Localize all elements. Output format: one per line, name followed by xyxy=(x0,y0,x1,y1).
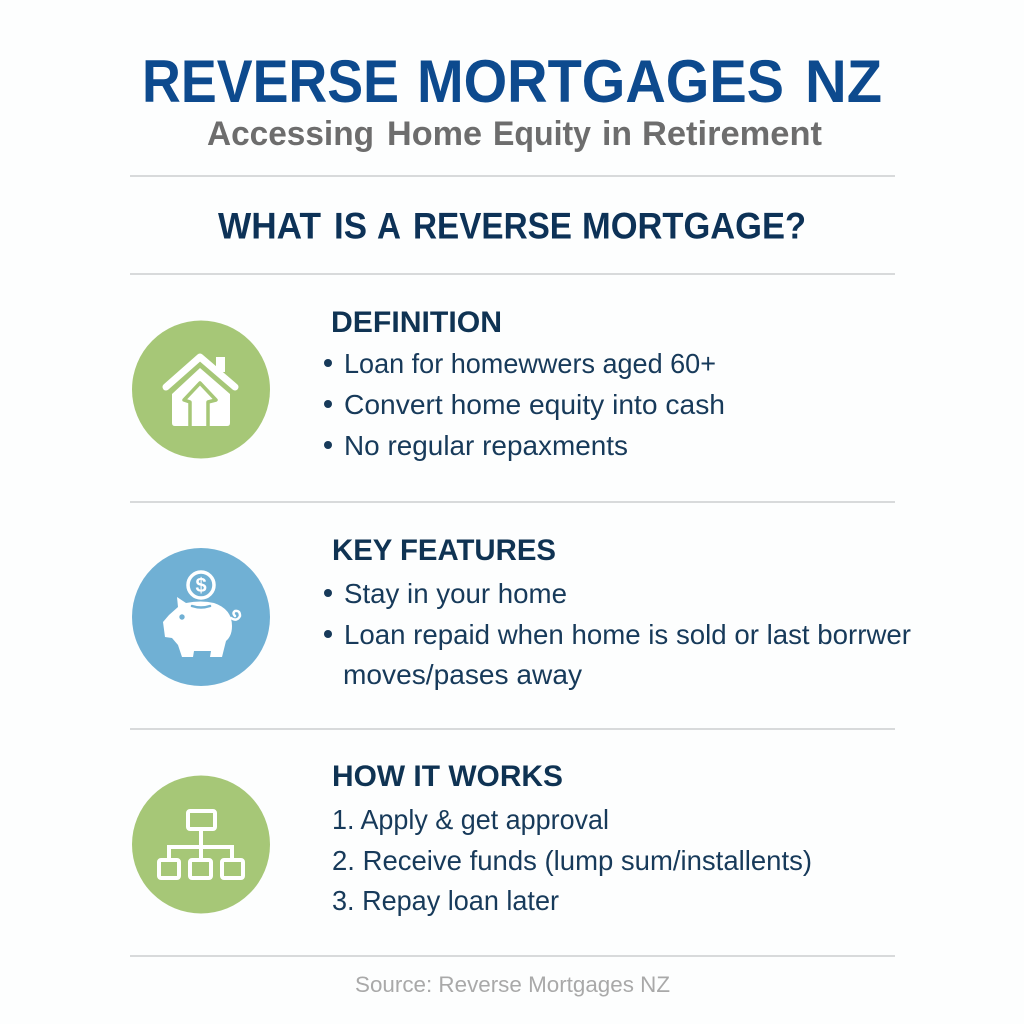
subtitle: in xyxy=(602,115,632,153)
section heading: MORTGAGE? xyxy=(582,206,806,246)
key features list xyxy=(324,578,911,690)
definition list: Convert home equity into cash xyxy=(344,389,725,420)
subtitle xyxy=(207,115,822,153)
key features list: moves/pases away xyxy=(343,659,582,690)
definition list: Loan for homewwers aged 60+ xyxy=(344,348,716,379)
steps list: 3. Repay loan later xyxy=(332,885,559,916)
title: MORTGAGES xyxy=(417,48,784,115)
definition list xyxy=(324,348,725,461)
title xyxy=(142,48,882,115)
key features list: Stay in your home xyxy=(344,578,567,609)
title: NZ xyxy=(805,48,882,115)
section heading xyxy=(218,206,806,246)
heading: definition: DEFINITION xyxy=(331,306,502,339)
definition list: No regular repaxments xyxy=(344,430,628,461)
icon: piggy bank with coin xyxy=(132,548,270,686)
panel: how it works xyxy=(132,760,812,916)
section heading: REVERSE xyxy=(413,206,572,246)
source note: Source: Reverse Mortgages NZ xyxy=(355,972,670,997)
panel: definition xyxy=(132,306,725,461)
subtitle: Home xyxy=(387,115,482,153)
section heading: WHAT xyxy=(218,206,321,246)
icon: house with up arrow xyxy=(132,320,270,458)
panel: key features xyxy=(132,534,911,690)
steps list: 2. Receive funds (lump sum/installents) xyxy=(332,845,812,876)
section heading: A xyxy=(377,206,401,246)
subtitle: Accessing xyxy=(207,115,374,153)
subtitle: Equity xyxy=(493,115,591,153)
key features list: Loan repaid when home is sold or last borrwer xyxy=(344,619,911,650)
steps list xyxy=(332,804,812,916)
heading: how it works: HOW IT WORKS xyxy=(332,760,563,793)
subtitle: Retirement xyxy=(642,115,822,153)
steps list: 1. Apply & get approval xyxy=(332,804,609,835)
section heading: IS xyxy=(334,206,367,246)
icon: piggy bank with coin: $ xyxy=(195,575,207,597)
title: REVERSE xyxy=(142,48,399,115)
heading: key features: KEY FEATURES xyxy=(332,534,556,567)
icon: flow chart xyxy=(132,776,270,914)
